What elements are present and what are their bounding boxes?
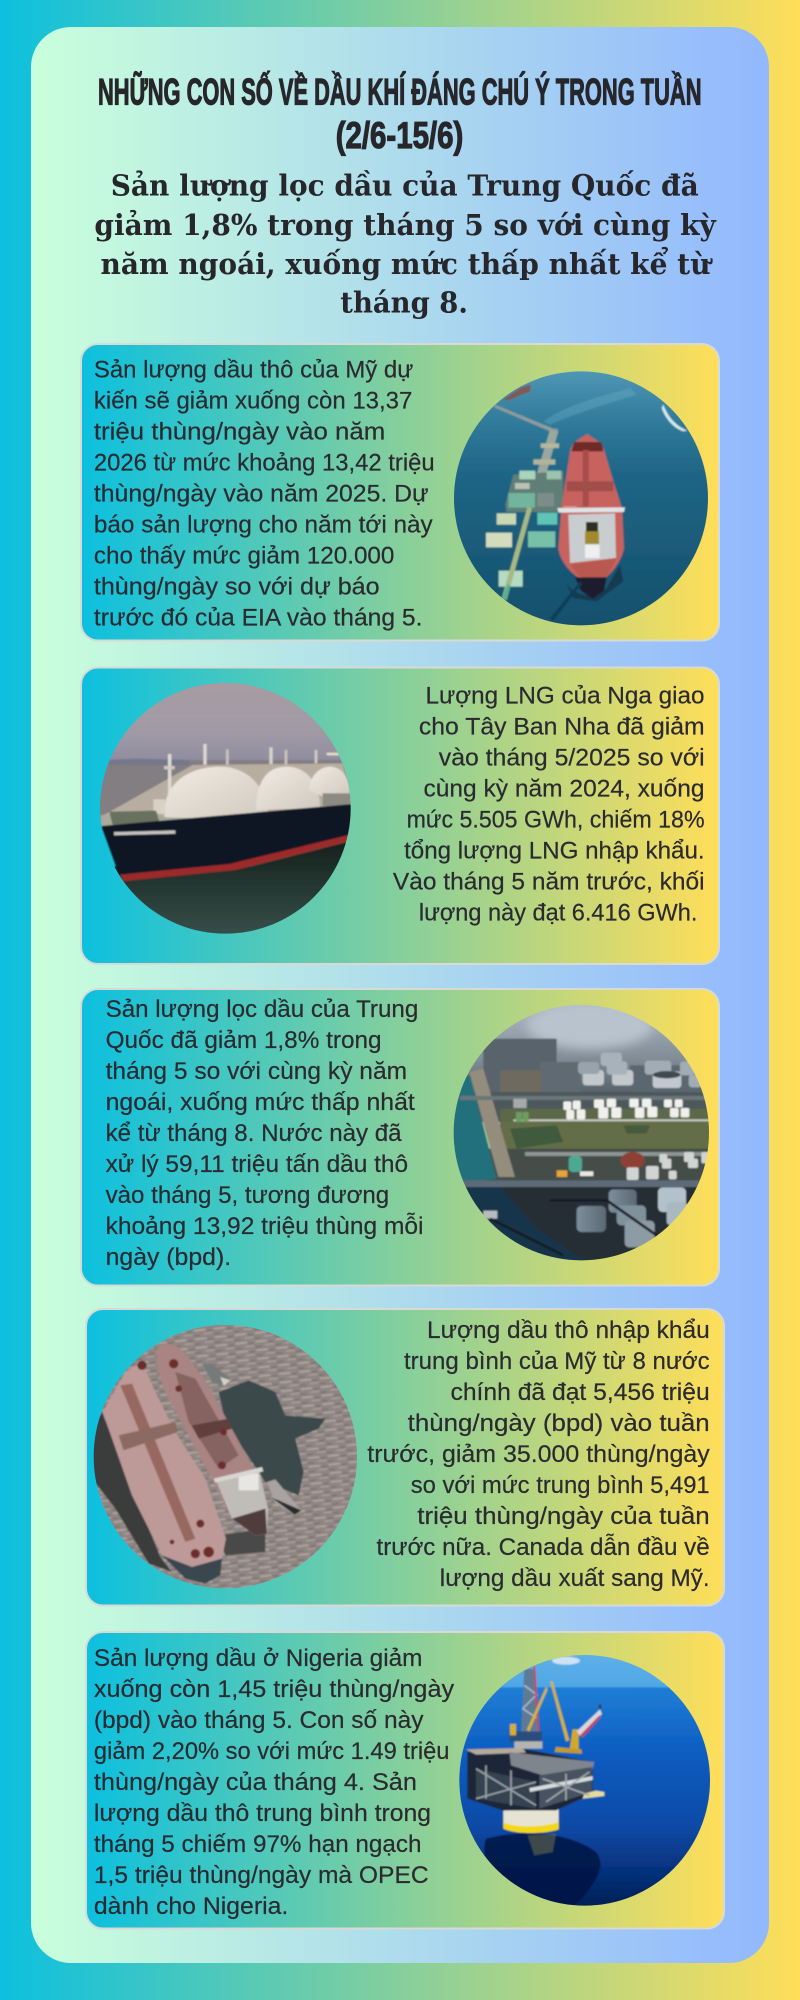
- photo: offshore oil platform: [456, 1652, 714, 1910]
- text: Russian LNG to Spain: cho Tây Ban Nha đã giảm: [419, 714, 705, 740]
- text: China refinery output: Quốc đã giảm 1,8% trong: [106, 1027, 382, 1054]
- panel: US crude output: [81, 344, 719, 640]
- text: US crude imports: lượng dầu xuất sang Mỹ.: [440, 1565, 710, 1592]
- text: US crude output: cho thấy mức giảm 120.000: [94, 542, 394, 570]
- text: Nigeria output: 1,5 triệu thùng/ngày mà OPEC: [94, 1862, 429, 1889]
- text: Nigeria output: giảm 2,20% so với mức 1.49 triệu: [94, 1738, 450, 1765]
- title: (2/6-15/6): [336, 115, 463, 156]
- panel: US crude imports: [86, 1309, 724, 1606]
- text: China refinery output: vào tháng 5, tương đương: [106, 1182, 389, 1209]
- text: Russian LNG to Spain: mức 5.505 GWh, chiếm 18%: [407, 806, 705, 834]
- text: US crude imports: chính đã đạt 5,456 triệu: [450, 1379, 710, 1406]
- subtitle: tháng 8.: [340, 286, 468, 320]
- text: Russian LNG to Spain: [393, 682, 705, 926]
- photo: tanker at jetty: [450, 368, 712, 630]
- text: China refinery output: khoảng 13,92 triệu thùng mỗi: [106, 1213, 423, 1240]
- text: Nigeria output: (bpd) vào tháng 5. Con số này: [94, 1707, 424, 1734]
- subtitle: năm ngoái, xuống mức thấp nhất kể từ: [100, 245, 713, 281]
- text: China refinery output: ngày (bpd).: [106, 1244, 231, 1271]
- text: US crude imports: Lượng dầu thô nhập khẩu: [427, 1317, 710, 1344]
- text: Nigeria output: xuống còn 1,45 triệu thùng/ngày: [94, 1676, 454, 1703]
- text: Russian LNG to Spain: cùng kỳ năm 2024, xuống: [424, 776, 704, 802]
- text: US crude imports: trước, giảm 35.000 thùng/ngày: [367, 1441, 710, 1468]
- subtitle: [94, 169, 717, 320]
- subtitle: giảm 1,8% trong tháng 5 so với cùng kỳ: [94, 208, 717, 242]
- panel: Nigeria output: [86, 1632, 724, 1928]
- text: Nigeria output: [94, 1645, 454, 1920]
- panel: China refinery output: [81, 989, 720, 1286]
- text: China refinery output: Sản lượng lọc dầu của Trung: [106, 996, 418, 1023]
- text: US crude output: báo sản lượng cho năm tới này: [94, 512, 433, 538]
- text: Nigeria output: lượng dầu thô trung bình trong: [94, 1800, 431, 1827]
- text: US crude imports: trung bình của Mỹ từ 8 nước: [404, 1348, 710, 1375]
- text: US crude imports: [367, 1317, 710, 1592]
- text: US crude output: Sản lượng dầu thô của Mỹ dự: [94, 356, 413, 384]
- text: US crude output: 2026 từ mức khoảng 13,42 triệu: [94, 450, 435, 476]
- text: US crude output: thùng/ngày vào năm 2025. Dự: [94, 480, 429, 508]
- text: US crude output: [94, 356, 435, 632]
- text: Nigeria output: Sản lượng dầu ở Nigeria giảm: [94, 1645, 423, 1672]
- text: US crude output: trước đó của EIA vào tháng 5.: [94, 604, 423, 632]
- photo: LNG carrier: [96, 680, 354, 938]
- text: China refinery output: xử lý 59,11 triệu tấn dầu thô: [106, 1151, 408, 1178]
- text: US crude imports: triệu thùng/ngày của tuần: [417, 1503, 710, 1530]
- photo: refinery and tank farm: [450, 1002, 720, 1267]
- text: China refinery output: ngoái, xuống mức thấp nhất: [106, 1089, 415, 1116]
- panel: Russian LNG to Spain: [81, 668, 719, 964]
- subtitle: Sản lượng lọc dầu của Trung Quốc đã: [111, 169, 699, 203]
- text: Russian LNG to Spain: Lượng LNG của Nga giao: [426, 682, 704, 710]
- photo: two tankers side by side: [92, 1322, 360, 1590]
- text: Russian LNG to Spain: Vào tháng 5 năm trước, khối: [393, 868, 705, 896]
- text: Russian LNG to Spain: tổng lượng LNG nhập khẩu.: [404, 838, 705, 864]
- text: US crude output: thùng/ngày so với dự báo: [94, 574, 380, 600]
- text: Nigeria output: dành cho Nigeria.: [94, 1893, 288, 1920]
- text: Nigeria output: thùng/ngày của tháng 4. Sản: [94, 1769, 417, 1796]
- text: Nigeria output: tháng 5 chiếm 97% hạn ngạch: [94, 1831, 422, 1858]
- text: Russian LNG to Spain: lượng này đạt 6.416 GWh.: [419, 900, 697, 926]
- text: China refinery output: tháng 5 so với cùng kỳ năm: [106, 1058, 407, 1085]
- text: Russian LNG to Spain: vào tháng 5/2025 so với: [439, 744, 705, 772]
- text: China refinery output: kể từ tháng 8. Nước này đã: [106, 1120, 402, 1147]
- text: US crude output: triệu thùng/ngày vào năm: [94, 418, 385, 446]
- text: US crude imports: trước nữa. Canada dẫn đầu về: [376, 1534, 710, 1561]
- text: China refinery output: [106, 996, 423, 1271]
- text: US crude imports: thùng/ngày (bpd) vào tuần: [408, 1410, 710, 1437]
- title: [98, 70, 702, 156]
- text: US crude output: kiến sẽ giảm xuống còn 13,37: [94, 388, 412, 414]
- text: US crude imports: so với mức trung bình 5,491: [411, 1472, 710, 1499]
